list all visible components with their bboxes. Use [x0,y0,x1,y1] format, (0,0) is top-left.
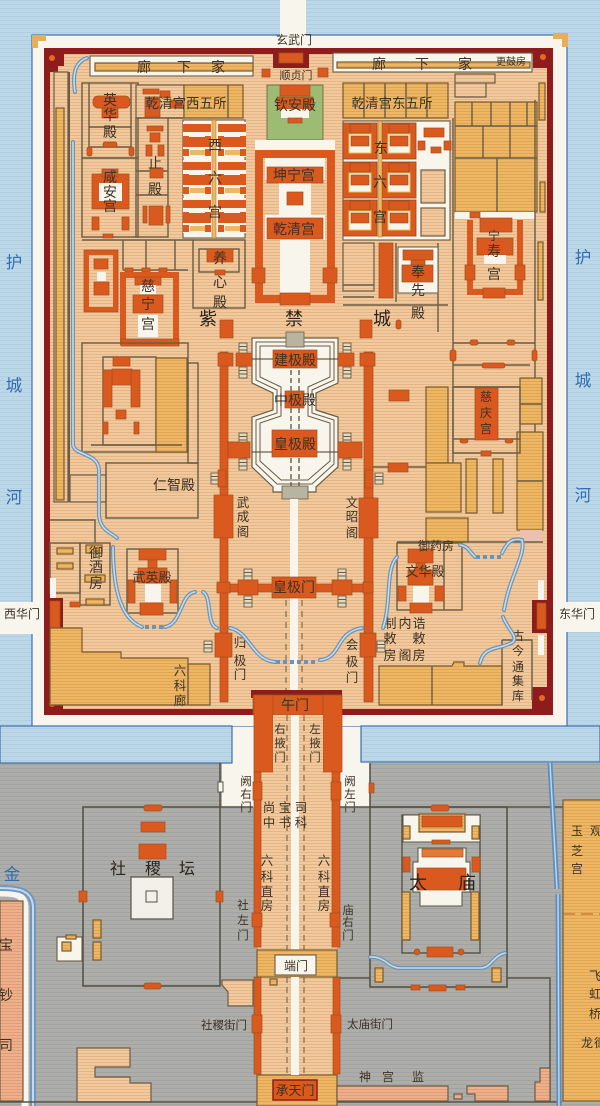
Meridian gate (Wumen): 右 [274,722,286,736]
Outer west wall gate labels: 门 [240,800,252,814]
east long corridor: 下 [415,56,429,72]
Xian'an palace compound: 安 [103,184,117,200]
Yinghua hall compound [82,83,138,158]
Xian'an palace compound: 咸 [103,169,117,185]
Yujiufang wine office: 御 [89,545,103,561]
corner towers [44,48,553,713]
Neige cabinet and edict offices label: 房 [412,648,426,663]
Meridian gate (Wumen): 掖 [309,736,321,750]
west corridor gates: 阁 [237,525,249,539]
avenue office labels: 科 [318,870,331,884]
Ningshou palace: 寿 [487,243,501,259]
avenue office labels: 司 [295,801,307,815]
Yangxin hall [193,240,245,310]
Shengong office and lower east buildings [0,978,562,1102]
Yangxin hall: 殿 [213,294,227,310]
southeast gold block [379,662,502,705]
Fengxian hall: 先 [411,282,425,298]
Longde hall column: 殿 [148,181,162,197]
southwest gold block and Liuke corridor: 廊 [174,693,186,708]
west six palaces [183,120,246,238]
Gujin tongji library: 通 [512,660,524,674]
Outer east wall gate labels [342,775,393,1031]
Chengtian gate [257,1075,337,1106]
Yuzhi palace gold block: 宫 [571,861,583,876]
Imperial Ancestral Temple precinct: 庙 [458,873,476,893]
Ciqing palace: 宫 [480,421,492,436]
moat labels west [6,253,22,507]
avenue office labels: 六 [318,854,330,868]
Outer west wall gate labels [201,775,252,1032]
corner marker north-east [553,33,568,47]
southern district grey ground [0,727,600,1106]
Xuanwu gate tower and label: 玄武门 [276,32,312,47]
east six palaces: 六 [373,174,387,190]
Yinghua hall compound: 殿 [103,124,117,140]
Donghua gate: 东华门 [559,606,595,621]
Altar of Land and Grain precinct: 社 [110,860,126,878]
Forbidden City title: zi: 紫 [199,309,217,329]
avenue ground between gates [258,772,337,1106]
central stone terrace of three halls [252,338,338,492]
Baochao office and golden water: 金 [4,865,21,884]
west long corridor: 下 [177,59,191,75]
avenue office labels: 房 [261,898,273,913]
southern gap in moat [233,727,361,763]
Outer west wall gate labels: 社 [237,898,249,912]
east six palaces: 东 [374,140,388,156]
Neige cabinet and edict offices label: 房 [383,648,397,663]
east long corridor: 更鼓房 [496,55,526,68]
Neige cabinet and edict offices label: 诰 [412,616,426,631]
avenue west wall [252,772,262,1074]
Qianqing east five courts [343,83,448,118]
moat labels east [575,248,591,505]
Yujiufang wine office: 酒 [89,559,103,575]
Meridian gate (Wumen): 掖 [274,736,286,750]
Yuzhi palace gold block: 芝 [571,843,583,858]
Yangxin hall: 养 [213,250,227,266]
Gujin tongji library: 今 [512,643,524,658]
Yuzhi palace gold block: 龙 [581,1036,593,1050]
eastern gold storehouse block [455,74,545,300]
Outer east wall gate labels: 阙 [344,775,356,788]
Ciqing palace [453,387,520,456]
Huangji hall [272,430,317,457]
southwest gold block and Liuke corridor: 六 [174,664,186,678]
Jianji hall: 建极殿 [274,352,316,368]
Outer west wall gate labels: 门 [237,928,249,942]
Longde hall column: 止 [148,155,162,171]
inner golden water stream [73,58,523,663]
Buddha hall compound [82,240,193,312]
east corridor gates: 会 [346,638,359,652]
corner marker north-west [32,35,46,48]
Fengxian hall [343,100,535,500]
Neige cabinet and edict offices label: 阁 [398,648,412,663]
palace white precinct surround [32,35,567,727]
Outer east wall gate labels: 右 [342,915,354,929]
Neige cabinet and edict offices label: 内 [398,616,412,631]
Cining palace: 宫 [141,316,155,332]
palace outer wall [47,51,550,712]
Qin'an hall green garden: 钦安殿 [274,97,316,113]
east gate rings and yard lines [396,320,537,387]
moat labels east: 河 [575,486,591,505]
Gujin tongji library [502,628,532,705]
west long corridor: 家 [211,59,225,75]
avenue office labels: 尚 [263,801,275,815]
Huangji hall: 皇极殿 [274,436,316,452]
Outer east wall gate labels: 太庙街门 [347,1017,393,1031]
avenue office labels: 中 [263,815,275,830]
Xihua gate: 西华门 [4,606,40,621]
road north to Xuanwu gate [280,0,306,36]
west six palaces: 西 [208,137,222,153]
west corridor gates: 门 [234,667,246,682]
Outer east wall gate labels: 门 [342,928,354,942]
Wuying hall [127,549,178,615]
southwest gold block and Liuke corridor: 科 [174,679,187,693]
Renzhi hall [106,463,198,518]
avenue lower center path [287,977,304,1075]
Altar of Land and Grain precinct [57,763,253,989]
Ningshou palace [455,212,535,298]
Wenhua hall: 文华殿 [405,564,445,579]
Outer west wall gate labels: 左 [237,913,249,927]
Xuanwu gate tower and label [262,32,328,82]
Fengxian hall: 奉 [411,264,425,280]
Zhongji hall: 中极殿 [274,392,316,408]
Cining palace [121,275,179,346]
Meridian gate (Wumen): 午门 [281,697,309,713]
avenue office labels: 宝 [279,801,291,815]
west corridor wall [220,352,228,702]
Neige cabinet and edict offices label: 制 [383,616,397,631]
Shengong office and lower east buildings: 神 [359,1070,371,1084]
Ningshou palace: 宁 [488,228,500,243]
Xian'an palace compound: 宫 [103,198,117,214]
avenue office labels: 书 [279,816,291,830]
Altar of Land and Grain precinct: 稷 [145,860,161,878]
Baochao office and golden water [0,865,33,1106]
Duan gate: 端门 [284,958,308,973]
east corridor gates: 极 [346,655,359,669]
avenue east wall [330,772,341,1074]
southwest gold block and Liuke corridor [50,628,210,708]
Chengtian gate: 承天门 [275,1083,315,1098]
Duan gate [257,950,337,985]
east corridor gates: 昭 [346,510,358,524]
Yujiufang wine office [50,543,110,607]
Yujiufang wine office: 房 [89,575,103,591]
Outer west wall gate labels: 右 [240,787,252,801]
Xuanwu gate tower and label: 顺贞门 [280,68,312,82]
avenue office labels: 科 [261,870,274,884]
palace ground [46,50,551,712]
Meridian gate (Wumen): 左 [309,722,321,736]
Donghua gate [532,580,595,655]
moat water background [0,0,600,763]
Wenhua hall: 御药房 [418,538,454,553]
Imperial Ancestral Temple precinct: 太 [409,873,427,893]
west six palaces: 宫 [208,204,222,220]
Wenhua hall [397,538,462,613]
Qianqing west five courts [136,85,243,118]
west six palaces: 六 [208,170,222,186]
Qin'an hall green garden [267,85,323,140]
east corridor gates [317,320,426,685]
Ningshou palace: 宫 [487,266,501,282]
west edge strips [50,72,106,543]
avenue office labels: 直 [261,885,273,899]
Ciqing palace: 庆 [480,406,492,420]
Gujin tongji library: 古 [512,628,524,643]
Xihua gate [4,578,63,656]
Forbidden City title: cheng: 城 [373,309,391,329]
Yuzhi palace gold block [563,800,600,1101]
avenue office labels: 科 [295,816,308,830]
Altar of Land and Grain precinct: 坛 [179,860,195,878]
Qianqing west five courts: 乾清宫西五所 [146,96,226,111]
Yangxin hall: 心 [213,274,227,290]
east long corridor: 廊 [372,56,386,72]
Forbidden City title: jin: 禁 [285,309,303,329]
avenue office labels: 直 [318,885,330,899]
Neige cabinet and edict offices label [383,616,426,663]
west corridor gates: 成 [237,510,249,524]
Huangji gate [217,569,373,607]
Gujin tongji library: 库 [512,688,524,703]
Cining palace: 宁 [141,296,155,312]
Shengong office and lower east buildings: 监 [412,1070,424,1084]
Meridian gate (Wumen) [251,690,342,950]
east six palaces [343,121,451,240]
Yinghua hall compound: 英 [103,92,117,108]
Yuzhi palace gold block: 玉 [571,824,583,838]
Qianqing palace compound: 坤宁宫 [273,167,315,183]
Gujin tongji library: 集 [512,673,524,688]
Outer east wall gate labels: 庙 [342,903,354,917]
Yinghua hall compound: 华 [103,107,117,123]
avenue office labels [261,801,331,913]
Qianqing palace compound [252,140,337,305]
Meridian gate (Wumen): 门 [309,750,321,764]
Meridian gate (Wumen): 门 [274,750,286,764]
Xian'an palace compound [82,158,138,238]
west corridor gates: 极 [234,654,247,668]
Outer west wall gate labels: 社稷街门 [201,1018,247,1032]
west corridor gates: 武 [237,496,250,510]
east corridor gates: 门 [346,670,358,685]
east corridor wall [364,352,373,702]
moat labels west: 河 [6,488,22,507]
Southwest peach building [77,1048,151,1102]
east long corridor [333,53,532,72]
Ciqing palace: 慈 [480,389,492,404]
small peach court by west wall [222,980,253,1006]
terrace stairways [282,332,308,499]
west corridor gates: 归 [234,636,246,650]
Shengong office and lower east buildings: 宫 [382,1069,394,1084]
west long corridor [90,56,253,76]
road west to Xihua gate [0,602,33,634]
Cining palace: 慈 [141,278,155,294]
southern approach white road [0,726,600,807]
Imperial Ancestral Temple precinct [340,763,563,991]
Huangji gate: 皇极门 [273,579,315,595]
Qianqing east five courts: 乾清宫东五所 [352,96,432,111]
east gold block stores [397,378,543,542]
west corridor gates [204,320,273,682]
moat labels east: 护 [575,248,591,267]
moat labels east: 城 [575,371,591,390]
Outer east wall gate labels: 左 [344,787,356,801]
upper west compound [82,343,198,463]
Neige cabinet and edict offices label: 敕 [412,631,426,646]
Qianqing palace compound: 乾清宫 [273,221,315,237]
Neige cabinet and edict offices label: 敕 [383,631,397,646]
Fengxian hall: 殿 [411,305,425,321]
imperial way central path [286,499,302,690]
moat labels west: 城 [6,376,22,395]
Outer east wall gate labels: 门 [344,800,356,814]
road east to Donghua gate [566,602,600,632]
moat labels west: 护 [6,253,22,272]
east long corridor: 家 [458,56,472,72]
avenue office labels: 六 [261,854,273,868]
west long corridor: 廊 [137,59,151,75]
east six palaces: 宫 [373,209,387,225]
east blue canal [550,763,559,1106]
Outer west wall gate labels: 阙 [240,775,252,788]
east corridor gates: 阁 [346,526,358,540]
east corridor gates: 文 [346,495,359,510]
Renzhi hall: 仁智殿 [153,477,195,493]
Longde hall column [136,118,183,237]
avenue office labels: 房 [318,898,330,913]
Wuying hall: 武英殿 [132,570,172,585]
